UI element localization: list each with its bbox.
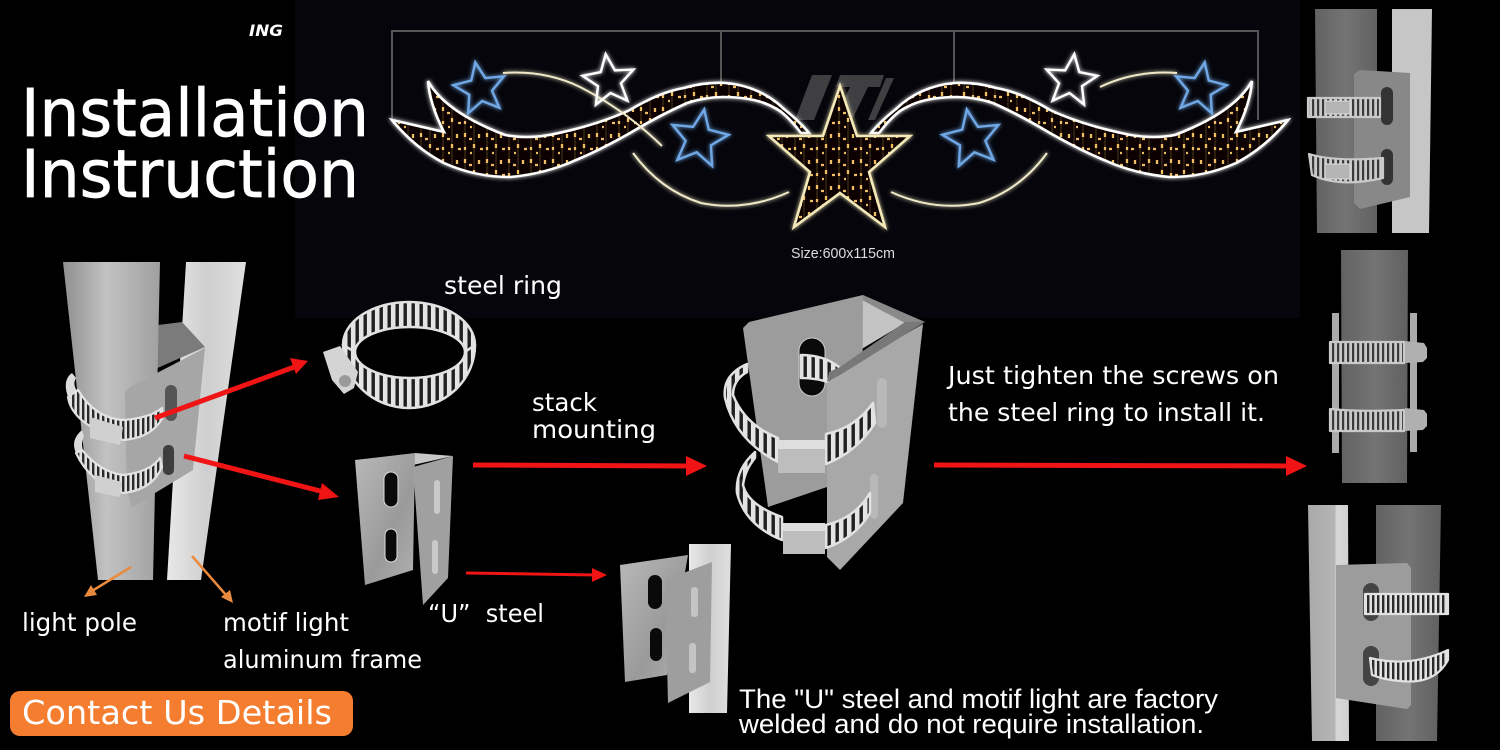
orange arrow to frame label	[192, 556, 233, 603]
back plate	[620, 555, 688, 682]
red arrow to result	[934, 456, 1307, 476]
label: stack mounting	[532, 388, 656, 444]
red arrow to steel ring	[155, 358, 308, 418]
contact button: Contact Us Details	[22, 693, 332, 732]
photo: middle right view	[1330, 250, 1427, 483]
inner wall	[413, 453, 453, 465]
photo: pole with bracket, 3/4 view	[63, 262, 246, 580]
ribbon	[871, 81, 1288, 177]
flange rim	[827, 322, 925, 382]
flange	[827, 324, 923, 570]
orange arrow to light pole label	[84, 567, 131, 597]
factory welded note: welded and do not require installation.	[738, 709, 1204, 739]
label: light pole: light pole	[22, 608, 137, 637]
ribbon	[392, 81, 809, 177]
back plate	[743, 295, 863, 507]
photo: bottom right view	[1308, 505, 1448, 741]
icon: U steel	[355, 453, 453, 605]
label: motif light aluminum frame: aluminum frame	[223, 645, 422, 674]
clamps	[778, 440, 825, 473]
back band	[343, 302, 475, 352]
label: motif light aluminum frame: motif light	[223, 608, 349, 637]
back plate	[355, 453, 415, 585]
instruction text: the steel ring to install it.	[948, 398, 1265, 427]
back slot	[799, 338, 825, 396]
upper ring	[725, 364, 778, 462]
rings	[1308, 98, 1380, 117]
instruction text	[946, 361, 1279, 427]
slots	[165, 385, 177, 421]
mounting frame	[392, 31, 1258, 120]
title: Instruction	[21, 136, 359, 213]
cream swoosh lower	[633, 153, 789, 206]
white star	[1043, 51, 1100, 106]
frame	[689, 544, 731, 713]
upper ring	[66, 373, 78, 397]
lower ring	[737, 452, 782, 540]
clamps	[90, 417, 123, 445]
pole	[1315, 9, 1377, 233]
blue star	[450, 58, 509, 115]
factory welded note: The "U" steel and motif light are factory	[739, 684, 1219, 714]
rings	[1365, 594, 1448, 614]
factory welded note	[738, 684, 1219, 739]
size label: Size:600x115cm	[791, 245, 895, 262]
instruction text: Just tighten the screws on	[946, 361, 1279, 390]
label: motif light aluminum frame	[223, 608, 422, 674]
centre star	[769, 86, 910, 227]
lower ring	[74, 430, 84, 453]
title	[21, 75, 369, 213]
frame	[1308, 505, 1349, 741]
red arrow to U steel	[184, 456, 339, 500]
left half of motif	[392, 51, 809, 206]
clamps	[1325, 101, 1350, 114]
side bars	[1332, 313, 1339, 453]
clamp	[323, 346, 358, 394]
icon: steel ring	[323, 302, 475, 408]
plate	[1336, 563, 1411, 709]
light pole	[63, 262, 160, 580]
brand text fragment: ING	[249, 21, 283, 40]
front band	[343, 345, 475, 408]
title: Installation	[21, 75, 369, 152]
inner wall	[860, 300, 905, 350]
ring through slot	[801, 355, 840, 388]
white star	[580, 51, 637, 106]
flange	[413, 456, 453, 605]
label: steel ring: steel ring	[444, 271, 562, 300]
rings	[1330, 342, 1404, 363]
blue star	[1171, 58, 1230, 115]
label: stack mounting: mounting	[532, 415, 656, 444]
red arrow to assembly	[473, 456, 707, 476]
back of bracket	[153, 322, 205, 370]
label: U steel: “U” steel	[428, 599, 544, 628]
blue star large	[939, 105, 1004, 168]
blue star large	[667, 105, 732, 168]
cream swoosh upper	[503, 73, 662, 146]
flange slots	[877, 378, 887, 428]
cream swoosh upper	[1100, 73, 1177, 87]
red arrow: U steel to welded	[466, 568, 607, 582]
plate	[1354, 70, 1410, 209]
icon: U steel with rings assembly	[725, 295, 925, 570]
clamps	[1405, 341, 1427, 363]
banner panel background	[295, 0, 1300, 318]
right half of motif	[871, 51, 1288, 206]
motif light banner	[392, 31, 1288, 262]
label: stack mounting: stack	[532, 388, 598, 417]
icon: U steel welded to frame	[620, 544, 731, 713]
aluminum frame	[167, 262, 246, 580]
cream swoosh lower	[891, 153, 1047, 206]
bracket plate	[125, 348, 205, 507]
rim	[862, 295, 925, 324]
frame	[1392, 9, 1432, 233]
watermark logo	[795, 75, 894, 120]
pole	[1341, 250, 1408, 483]
flange	[665, 562, 712, 703]
pole	[1376, 505, 1441, 741]
photo: top right view	[1308, 9, 1432, 233]
